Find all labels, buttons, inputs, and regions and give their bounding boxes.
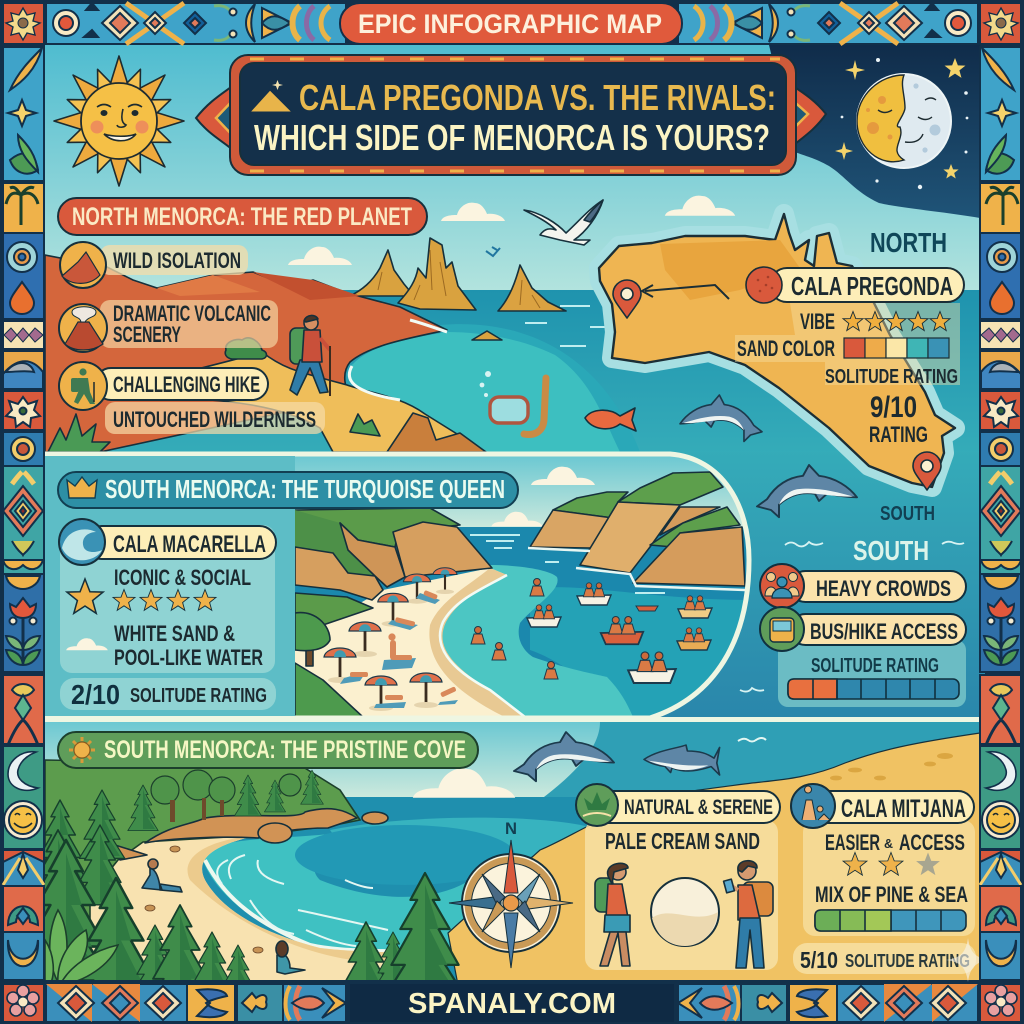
illustration: hiker man with phone <box>724 861 773 968</box>
item: wild isolation <box>60 242 248 288</box>
border: right strip <box>980 47 1021 980</box>
border: top strip left <box>46 3 346 44</box>
title line two: WHICH SIDE OF MENORCA IS YOURS? <box>254 117 770 158</box>
border: left strip <box>3 47 44 980</box>
heading pill: South Menorca Turquoise Queen <box>58 472 518 508</box>
item: untouched wilderness: UNTOUCHED WILDERNESS <box>113 407 316 432</box>
bush <box>225 338 266 359</box>
solitude rating 2/10: 2/10 <box>71 679 120 710</box>
panel: solitude rating south: SOLITUDE RATING <box>811 655 939 677</box>
sea glitter <box>525 305 608 347</box>
pill: Cala Macarella <box>59 519 276 565</box>
rock stacks <box>350 238 566 340</box>
icon: dolphin leaping bottom <box>514 732 614 781</box>
tile: flower <box>3 391 44 430</box>
rating 9/10 <box>869 391 928 447</box>
icon: moon <box>857 74 951 168</box>
foreground trees <box>45 799 84 878</box>
wavelets <box>740 542 964 692</box>
right south area background <box>640 445 985 720</box>
pill: heavy crowds: HEAVY CROWDS <box>816 576 951 601</box>
hiker <box>290 315 330 396</box>
icon: fish <box>585 408 636 431</box>
solitude rating 5/10: 5/10 <box>800 947 838 973</box>
text block: White sand <box>114 621 263 670</box>
icon: sand pile <box>250 90 292 112</box>
tile: palm <box>3 183 44 233</box>
illustration: red volcanic land with beach <box>45 238 566 452</box>
sand color legend: SAND COLOR <box>737 336 835 361</box>
item: challenging hike: CHALLENGING HIKE <box>113 372 260 397</box>
heading pill: pristine cove: SOUTH MENORCA: THE PRISTINE COVE <box>104 736 466 764</box>
tile: moon and sun <box>3 746 44 849</box>
sand color legend <box>737 336 949 361</box>
icon: dolphin swimming bottom <box>644 745 720 775</box>
tile: blue red arch <box>3 850 44 886</box>
badge: epic infographic map: EPIC INFOGRAPHIC MAP <box>358 9 662 39</box>
heading pill: South Menorca Turquoise Queen: SOUTH MENORCA: THE TURQUOISE QUEEN <box>105 474 505 504</box>
text block: Iconic and social <box>67 565 251 613</box>
panel: pristine cove <box>45 722 979 980</box>
title banner <box>196 55 826 175</box>
icon: bubbles <box>480 371 491 397</box>
label: N: N <box>505 819 517 838</box>
arrow to pin <box>642 285 729 299</box>
heading pill: pristine cove <box>58 732 478 768</box>
footer: site name: SPANALY.COM <box>408 988 617 1020</box>
heading pill: north menorca: NORTH MENORCA: THE RED PLANET <box>72 203 412 231</box>
panel: Cala Mitjana: MIX OF PINE & SEA <box>815 882 968 907</box>
text block: White sand: POOL-LIKE WATER <box>114 645 263 670</box>
rating 9/10: 9/10 <box>870 391 917 424</box>
panel: north scene sky and sea <box>45 45 980 455</box>
title line one: CALA PREGONDA VS. THE RIVALS: <box>299 77 776 118</box>
background trees <box>234 775 262 816</box>
big leaves <box>45 910 118 985</box>
item: dramatic volcanic scenery: DRAMATIC VOLCANIC <box>113 301 271 326</box>
map: Menorca island <box>599 214 955 490</box>
tile: spiral and drop <box>3 233 44 319</box>
solitude rating 5/10: SOLITUDE RATING <box>845 951 970 971</box>
cloud group north <box>288 196 735 265</box>
pill: bus hike access <box>760 607 966 651</box>
panel: south menorca <box>45 454 755 722</box>
night sky <box>769 45 980 218</box>
item: wild isolation: WILD ISOLATION <box>113 248 241 273</box>
tile: tulip <box>3 574 44 672</box>
item: dramatic volcanic scenery <box>59 300 278 352</box>
umbrellas <box>324 568 457 711</box>
border: bottom strip right <box>678 984 978 1022</box>
swimmers <box>471 578 558 679</box>
right cliffs <box>530 472 745 586</box>
tile: circle <box>3 432 44 466</box>
panel: natural and serene: PALE CREAM SAND <box>605 828 760 854</box>
icon: cloud <box>66 638 108 650</box>
tile: dolphin <box>3 351 44 389</box>
icon: dolphin north sea <box>680 395 762 441</box>
icon: snorkel mask <box>490 378 546 434</box>
footer: site name <box>350 984 674 1022</box>
panel: natural and serene <box>576 784 780 970</box>
tile: red folk <box>3 675 44 744</box>
sand beach left <box>90 838 384 980</box>
pill: Cala Pregonda: CALA PREGONDA <box>791 271 953 301</box>
person sitting <box>142 859 182 892</box>
border: bottom strip left <box>46 984 346 1022</box>
item: untouched wilderness <box>105 402 325 434</box>
towels <box>340 593 458 708</box>
item: dramatic volcanic scenery: SCENERY <box>113 322 181 347</box>
panel: Cala Mitjana: & <box>884 836 893 851</box>
panel: Cala Pregonda details backing <box>735 303 960 385</box>
pill: Cala Macarella: CALA MACARELLA <box>113 531 266 558</box>
text block: Iconic and social: ICONIC & SOCIAL <box>114 565 251 590</box>
banner ornaments <box>196 84 235 152</box>
tile: star and leaf <box>3 47 44 181</box>
agave plant <box>48 414 110 452</box>
solitude rating 5/10 <box>793 943 976 974</box>
forest land <box>45 759 362 919</box>
panel: natural and serene: NATURAL & SERENE <box>624 796 773 819</box>
sand beach <box>202 354 486 452</box>
rating 9/10: RATING <box>869 422 928 447</box>
sparkle watermark <box>946 938 990 982</box>
tile: zigzag <box>3 321 44 349</box>
vibe rating <box>800 309 950 334</box>
beach <box>295 568 525 717</box>
solitude rating 2/10: SOLITUDE RATING <box>130 685 267 707</box>
pin: Cala Pregonda <box>613 280 641 318</box>
sand right <box>448 733 985 985</box>
panel: Cala Mitjana: ACCESS <box>899 830 965 855</box>
pill: heavy crowds <box>760 564 966 608</box>
icon: seagull <box>524 200 603 245</box>
pill: Cala Pregonda <box>746 267 964 303</box>
headland rocks <box>115 809 388 860</box>
panel: Cala Mitjana <box>791 784 975 936</box>
tile: diamond <box>3 466 44 574</box>
illustration: hiker woman <box>595 863 630 966</box>
left info column <box>45 456 295 716</box>
panel: solitude rating south <box>778 640 966 707</box>
pill: bus hike access: BUS/HIKE ACCESS <box>810 619 958 644</box>
panel: Cala Mitjana: EASIER <box>825 830 880 855</box>
south panel outline <box>45 454 749 718</box>
panel: Cala Mitjana: CALA MITJANA <box>841 795 966 823</box>
left cliffs <box>295 508 492 717</box>
section divider <box>45 717 980 722</box>
person sitting 2 <box>276 941 305 974</box>
boats <box>527 583 712 683</box>
sunbathers <box>350 590 457 700</box>
foam line <box>349 320 447 400</box>
pin: south <box>913 452 941 490</box>
border: top strip right <box>678 3 978 44</box>
icon: sun <box>54 56 184 186</box>
cliff at coast <box>387 413 486 452</box>
heading pill: north menorca <box>58 198 427 235</box>
icon: dolphin south <box>757 465 857 517</box>
label: NORTH: NORTH <box>870 227 947 258</box>
red land <box>45 255 447 452</box>
solitude rating label: SOLITUDE RATING <box>825 366 958 388</box>
icon: pale sand sample <box>651 878 719 946</box>
badge: epic infographic map <box>340 3 682 44</box>
label: SOUTH on map: SOUTH <box>880 503 935 525</box>
item: challenging hike <box>59 362 268 410</box>
icon: night stars <box>835 58 968 189</box>
text block: White sand: WHITE SAND & <box>114 621 235 646</box>
label: SOUTH right column: SOUTH <box>853 535 929 566</box>
icon: compass rose <box>449 840 573 968</box>
icon: small birds <box>486 247 500 256</box>
solitude rating 2/10 <box>60 678 276 710</box>
vibe rating: VIBE <box>800 309 835 334</box>
